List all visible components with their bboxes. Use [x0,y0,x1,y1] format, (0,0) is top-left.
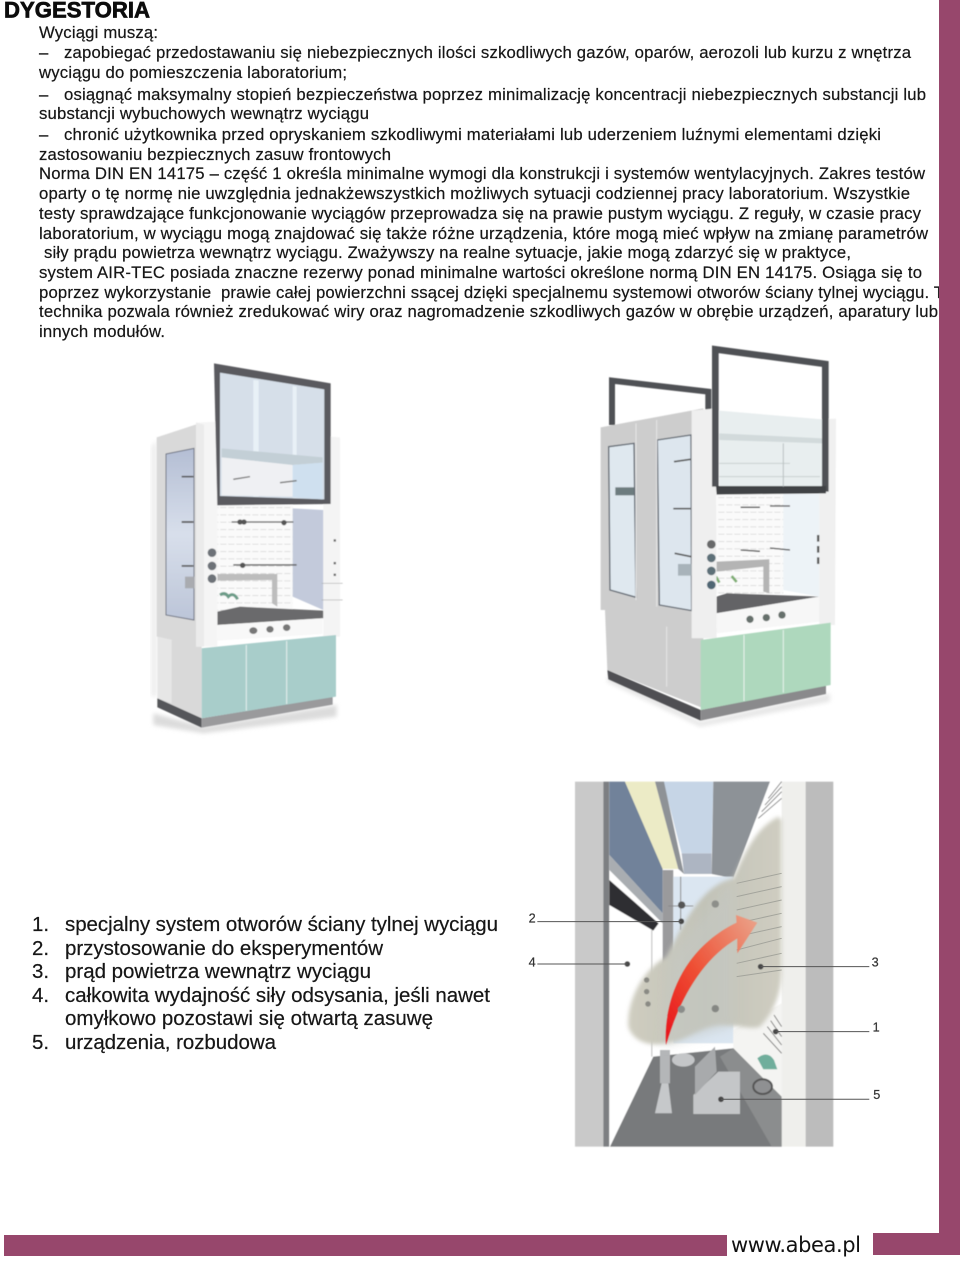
numbered list: 1. [32,913,49,936]
text block: requirements: zastosowaniu bezpiecznych zasuw frontowych [39,145,391,164]
text block: norm description: siły prądu powietrza wewnątrz wyciągu. Zważywszy na realne sytuacje, jakie mogą zdarzyć się w praktyce, [44,243,851,262]
numbered list: urządzenia, rozbudowa [65,1031,277,1054]
side windows [609,443,636,597]
text block: norm description: innych modułów. [39,322,165,341]
numbered list: 5. [32,1031,49,1054]
text block: norm description: poprzez wykorzystanie prawie całej powierzchni ssącej dzięki specjalnemu systemowi otworów ściany tylnej wyciągu. T [39,283,944,302]
text block: norm description: testy sprawdzające funkcjonowanie wyciągów przeprowadza się na prawie pustym wyciągu. Z reguły, w czasie pracy [39,204,922,223]
footer url: www.abea.pl [731,1233,861,1257]
text block: requirements: – [39,43,49,62]
sash [214,363,331,505]
stand [660,1050,670,1083]
red airflow arrow [666,915,757,1045]
callout numbers: 1 [873,1020,880,1034]
text block: requirements: chronić użytkownika przed opryskaniem szkodliwymi materiałami lub uderzeniem luźnymi elementami dzięki [64,125,881,144]
callout numbers: 4 [529,955,536,969]
text block: requirements: osiągnąć maksymalny stopień bezpieczeństwa poprzez minimalizację koncentracji niebezpiecznych substancji lub [64,85,926,104]
numbered list: 4. [32,984,49,1007]
numbered list: całkowita wydajność siły odsysania, jeśli nawet [65,984,490,1007]
numbered list: prąd powietrza wewnątrz wyciągu [65,960,371,983]
worktop [217,607,323,625]
plinth [607,670,701,721]
illustration: fume hood with closed sash [151,363,343,733]
cabinets [202,635,336,718]
interior back wall [217,505,293,612]
air plume [628,817,782,1044]
numbered list: 2. [32,937,49,960]
ceiling and lamp [663,782,713,853]
numbered list: 3. [32,960,49,983]
text block: requirements: – [39,85,49,104]
text block: norm description: laboratorium, w wyciągu mogą znajdować się także różne urządzenia, które mogą mieć wpływ na zmianę parametrów [39,224,929,243]
side window [166,448,194,620]
callout numbers: 3 [872,955,879,969]
text block: norm description: system AIR-TEC posiada znaczne rezerwy ponad minimalne wartości określone normą DIN EN 14175. Osiąga się to [39,263,922,282]
numbered list [32,913,498,1054]
rear wall white [733,1003,782,1147]
numbered list: przystosowanie do eksperymentów [65,937,383,960]
text block: norm description: Norma DIN EN 14175 – część 1 określa minimalne wymogi dla konstrukcji i systemów wentylacyjnych. Zakres testów [39,164,926,183]
text block: requirements [38,23,926,164]
interior [717,494,783,594]
callout numbers: 2 [529,912,536,926]
text block: requirements: substancji wybuchowych wewnątrz wyciągu [39,104,369,123]
illustration: fume hood with raised frame [601,349,836,727]
cabinets [701,623,831,710]
diagram: airflow inside fume hood [529,782,880,1147]
louvre lines [758,782,782,1053]
text block: norm description [39,164,944,341]
side panel [601,408,703,708]
plinth [157,698,202,728]
text block: requirements: wyciągu do pomieszczenia laboratorium; [38,63,347,82]
callout numbers [529,912,880,1102]
callout numbers: 5 [873,1088,880,1102]
worktop [717,593,819,613]
column and back window [663,870,673,1030]
numbered list: specjalny system otworów ściany tylnej wyciągu [65,913,498,936]
numbered list: omyłkowo pozostawi się otwartą zasuwę [65,1007,433,1030]
sash [609,855,663,923]
text block: requirements: Wyciągi muszą: [39,23,158,42]
pillars [692,408,717,638]
text block: norm description: oparty o tę normę nie uwzględnia jednakżewszystkich możliwych sytuacji codziennej pracy laboratorium. Wszystkie [39,184,910,203]
sash [719,411,823,487]
left and right pillars [575,782,603,1147]
text block: requirements: zapobiegać przedostawaniu się niebezpiecznych ilości szkodliwych gazów, oparów, aerozoli lub kurzu z wnętrza [64,43,912,62]
outlet [753,1079,772,1094]
side panel [157,423,202,718]
markers [625,900,778,1102]
pillars [196,422,217,647]
text block: requirements: – [39,125,49,144]
box apparatus [693,1072,740,1114]
rear frame [612,381,708,425]
text block: norm description: technika pozwala również zredukować wiry oraz nagromadzenie szkodliwych gazów w obrębie urządzeń, aparatury lub [39,302,938,321]
worktop [610,1048,782,1147]
leader lines [537,922,869,1099]
